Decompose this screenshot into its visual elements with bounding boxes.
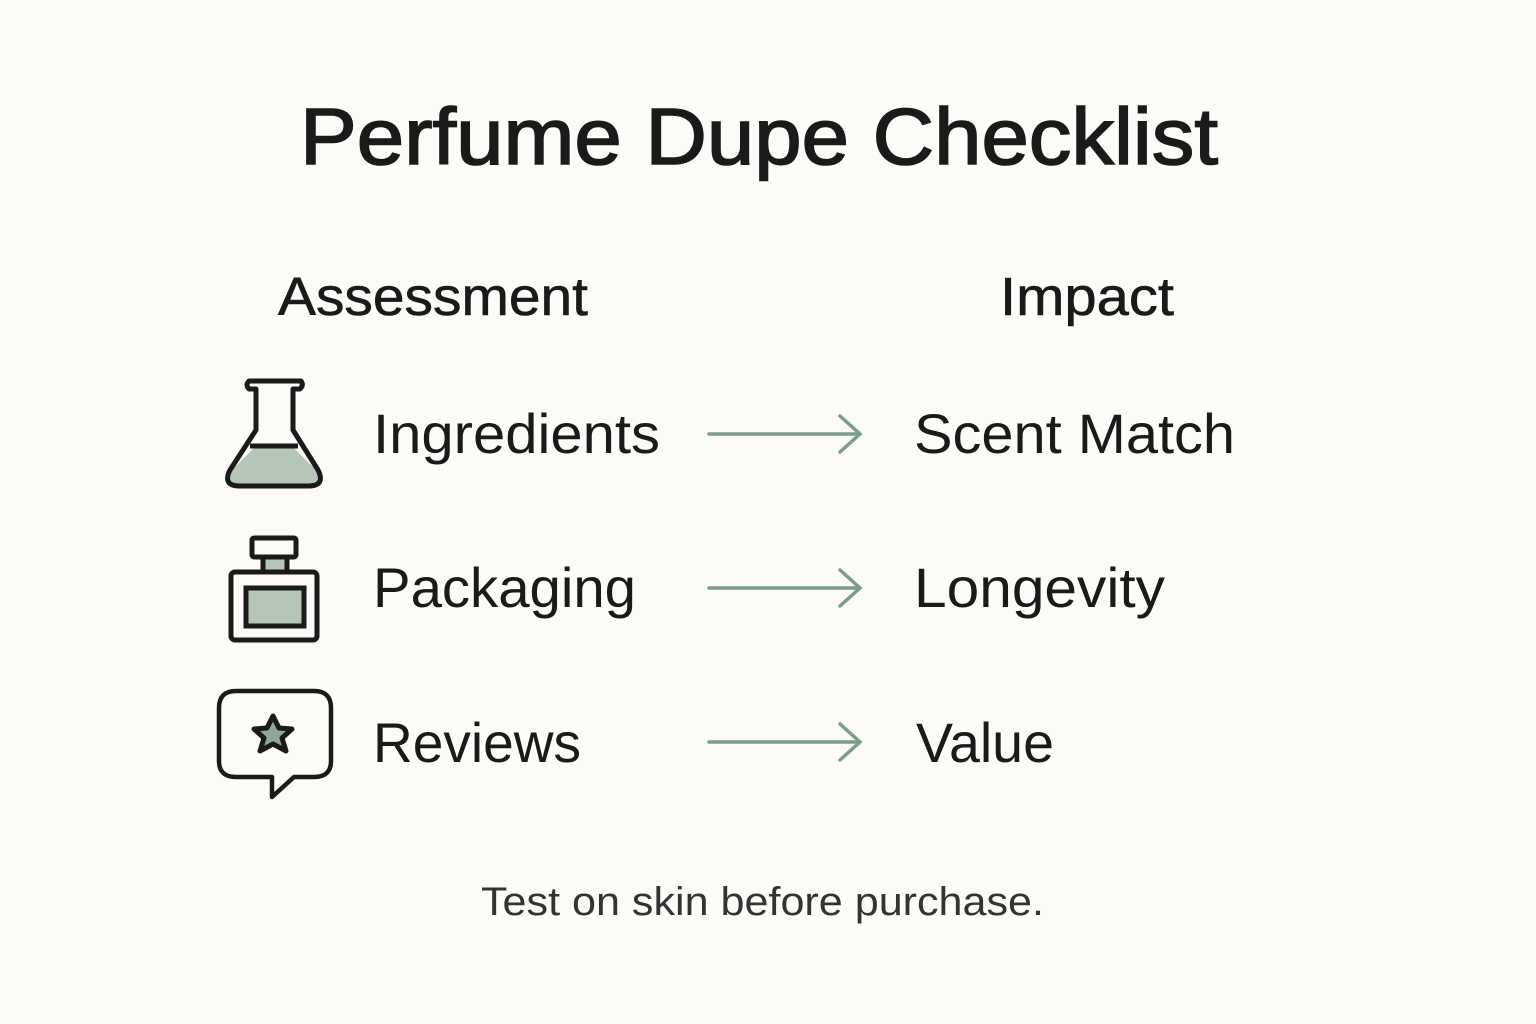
arrow 3 (709, 724, 860, 760)
row 1 text: Ingredients (373, 402, 660, 465)
row 3 impact: Value (916, 711, 1054, 774)
arrow 1 (709, 416, 860, 452)
heading: Impact: Impact (1000, 267, 1174, 327)
title: Perfume Dupe Checklist (300, 92, 1218, 181)
arrow 2 (709, 570, 860, 606)
icon: perfume bottle (231, 538, 317, 640)
icon: review bubble (219, 691, 331, 797)
row 3 text: Reviews (373, 711, 581, 774)
row 2 impact: Longevity (914, 556, 1165, 619)
icon: flask (228, 381, 320, 486)
footer note: Test on skin before purchase. (481, 880, 1044, 924)
row 2 text: Packaging (373, 556, 636, 619)
row 1 impact: Scent Match (914, 402, 1235, 465)
heading: Assessment: Assessment (278, 267, 588, 327)
